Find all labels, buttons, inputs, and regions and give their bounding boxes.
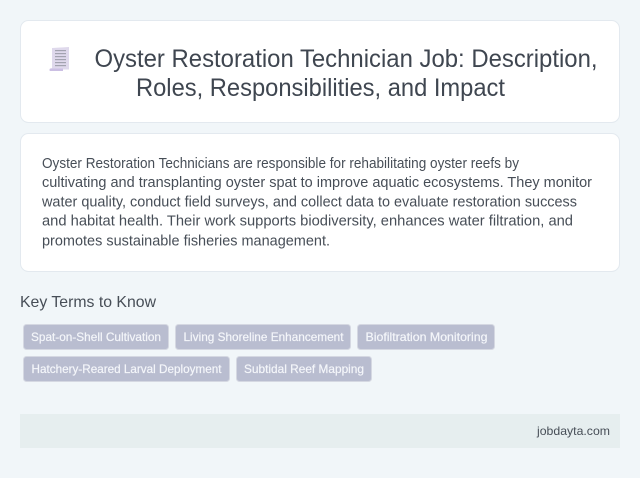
text block: description <box>41 156 592 250</box>
tag: Spat-on-Shell Cultivation <box>24 324 168 350</box>
text block: description: promotes sustainable fisheries management. <box>42 234 330 250</box>
panel: title card <box>20 20 620 122</box>
heading: key terms: Key Terms to Know <box>20 294 156 311</box>
tag: Biofiltration Monitoring <box>358 324 494 350</box>
term tags <box>24 324 494 382</box>
text block: description: and habitat health. Their work supports biodiversity, enhances water filtration, and <box>42 214 573 230</box>
icon: document scroll <box>50 47 69 71</box>
tag: Subtidal Reef Mapping: Subtidal Reef Mapping <box>244 362 364 376</box>
tag: Subtidal Reef Mapping <box>236 356 372 382</box>
title: Roles, Responsibilities, and Impact <box>136 74 505 102</box>
panel: description <box>20 134 620 272</box>
tag: Living Shoreline Enhancement: Living Shoreline Enhancement <box>184 330 344 344</box>
footer: jobdayta.com <box>536 424 610 438</box>
text block: description: cultivating and transplanting oyster spat to improve aquatic ecosystems. They monitor <box>42 175 592 191</box>
title: Oyster Restoration Technician Job: Description, <box>94 45 598 73</box>
text block: description: Oyster Restoration Technicians are responsible for rehabilitating oyster reefs by <box>42 156 520 172</box>
tag: Living Shoreline Enhancement <box>176 324 350 350</box>
tag: Hatchery-Reared Larval Deployment: Hatchery-Reared Larval Deployment <box>32 362 222 376</box>
title <box>94 45 598 102</box>
tag: Hatchery-Reared Larval Deployment <box>24 356 230 382</box>
tag: Biofiltration Monitoring: Biofiltration Monitoring <box>366 330 488 344</box>
footer <box>20 414 620 448</box>
tag: Spat-on-Shell Cultivation: Spat-on-Shell Cultivation <box>31 330 161 344</box>
text block: description: water quality, conduct field surveys, and collect data to evaluate restoration success <box>41 194 577 210</box>
